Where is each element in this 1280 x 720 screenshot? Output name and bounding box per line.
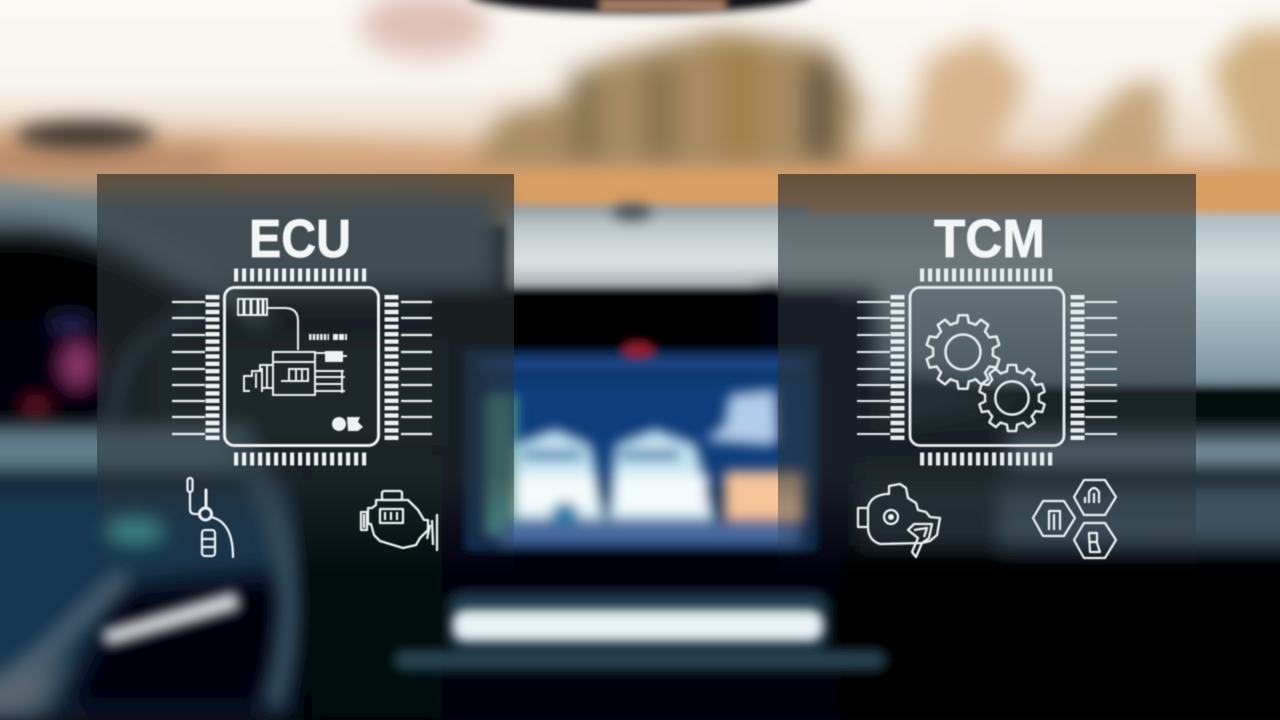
heading: ECU: ECU — [249, 209, 351, 269]
mirror mount — [612, 203, 652, 221]
lower console bar — [448, 592, 828, 652]
icon: ECU microchip — [172, 275, 432, 459]
icon: hexagon cluster — [1033, 480, 1116, 558]
upper left dash — [0, 190, 500, 290]
sky and horizon — [0, 0, 1280, 225]
icon: small gear — [978, 365, 1046, 431]
engine diagram inside ECU chip — [238, 299, 347, 395]
steering wheel highlight — [102, 592, 240, 645]
panel background TCM — [778, 174, 1196, 574]
instrument cluster — [0, 313, 105, 416]
centre screen — [466, 342, 816, 550]
steering spoke — [0, 426, 250, 476]
panel header band ECU — [97, 174, 514, 212]
panel background ECU — [97, 174, 514, 574]
windshield at right — [780, 214, 1280, 386]
icon: sensor — [188, 478, 233, 557]
panel: TCM — [778, 174, 1196, 574]
distant trees — [0, 0, 1280, 225]
icon: TCM microchip — [857, 275, 1117, 459]
panel header band TCM — [778, 174, 1196, 212]
steering wheel rim and surroundings — [0, 232, 190, 420]
heading: TCM: TCM — [934, 209, 1045, 269]
right console — [760, 290, 1280, 715]
panel: ECU — [97, 174, 514, 574]
icon: engine with cursor — [858, 484, 940, 557]
red indicator — [621, 342, 655, 358]
icon: large gear — [925, 315, 1001, 389]
distant dark shrub — [15, 120, 155, 150]
icon: engine — [361, 491, 437, 551]
windshield glass between panels — [508, 205, 808, 287]
orange dust band — [440, 170, 1280, 215]
rear view mirror — [468, 0, 812, 16]
dark dash — [430, 296, 850, 595]
